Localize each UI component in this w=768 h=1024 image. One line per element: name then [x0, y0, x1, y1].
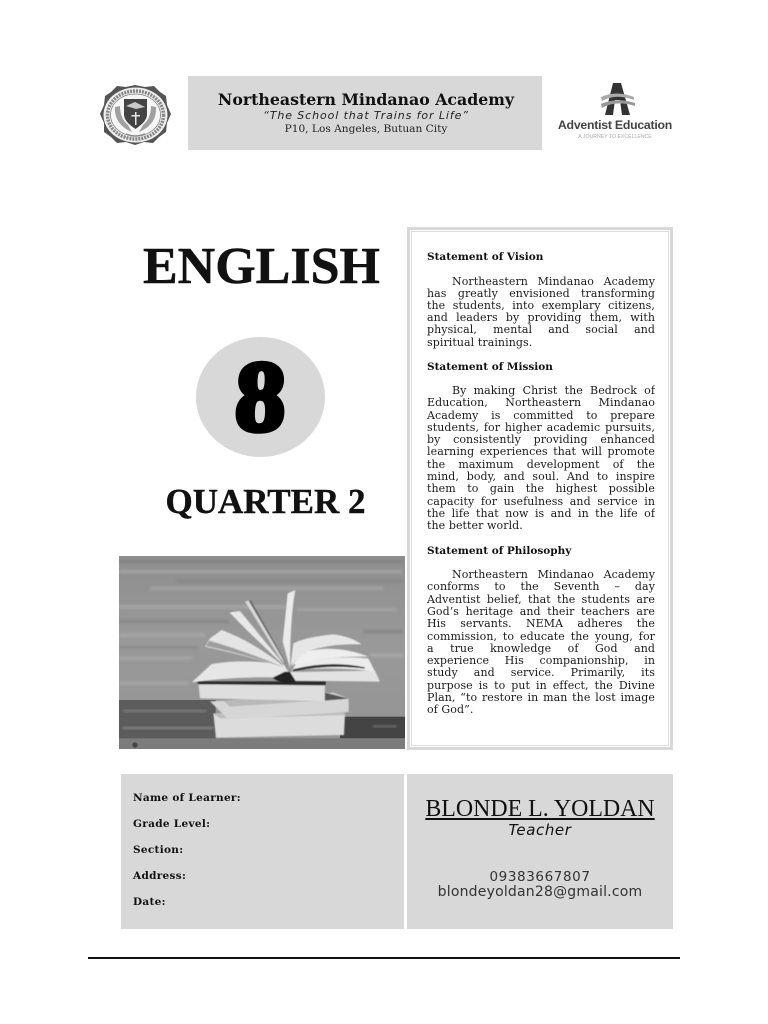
text: statement of philosophy: Northeastern Mindanao Academy	[452, 568, 655, 581]
logo tagline: A JOURNEY TO EXCELLENCE	[578, 134, 652, 140]
panel: statements	[407, 227, 673, 750]
teacher name: BLONDE L. YOLDAN	[425, 796, 655, 822]
text: statement of mission: Statement of Mission	[427, 361, 553, 373]
text: statement of philosophy: a true knowledge of God and	[427, 642, 655, 655]
text: statement of philosophy: Plan, “to restore in man the lost image	[427, 691, 655, 704]
panel: learner details	[121, 774, 404, 929]
text: statement of philosophy: of God”.	[427, 703, 473, 716]
text: statement of mission	[427, 361, 655, 532]
text: statement of mission: them to gain the highest possible	[427, 482, 655, 495]
school motto: “The School that Trains for Life”	[263, 109, 469, 122]
logo: Adventist Education	[558, 83, 672, 140]
text: statement of mission: Education, Northeastern Mindanao	[427, 396, 655, 409]
open book	[192, 590, 380, 683]
text: statement of vision: and leaders by providing them, with	[427, 311, 655, 324]
text: statement of mission: By making Christ the Bedrock of	[452, 384, 655, 397]
text: statement of philosophy	[427, 545, 655, 716]
text: statement of mission: the life that now is and in the life of	[427, 507, 655, 520]
text: statement of mission: by consistently providing enhanced	[427, 433, 655, 446]
text: statement of philosophy: God’s heritage and their teachers are	[427, 605, 655, 618]
photo: stack of books	[119, 556, 405, 749]
book stack	[197, 681, 349, 738]
teacher role: Teacher	[508, 821, 572, 839]
text: statement of mission: mind, body, and soul. And to inspire	[427, 470, 655, 483]
text: statement of philosophy: study and service. Primarily, its	[427, 666, 655, 679]
field: address: Address:	[133, 870, 186, 882]
grade badge	[196, 337, 325, 457]
text: statement of vision: the students, into exemplary citizens,	[427, 299, 655, 312]
teacher phone: 09383667807	[489, 869, 591, 885]
text: statement of philosophy: Adventist belief, that the students are	[427, 593, 655, 606]
field: date: Date:	[133, 896, 166, 908]
text: statement of vision	[427, 251, 655, 349]
text: statement of mission: the better world.	[427, 519, 523, 532]
school address: P10, Los Angeles, Butuan City	[285, 123, 447, 135]
school name: Northeastern Mindanao Academy	[218, 90, 514, 109]
subtitle: quarter: QUARTER 2	[165, 482, 366, 521]
logo wordmark: Adventist Education	[558, 118, 672, 132]
text: statement of philosophy: purpose is to put in effect, the Divine	[427, 679, 655, 692]
text: statement of vision: spiritual trainings.	[427, 336, 532, 349]
text: statement of philosophy: His servants. NEMA adheres the	[427, 617, 655, 630]
text: statement of philosophy: experience His companionship, in	[427, 654, 655, 667]
text: statement of vision: Statement of Vision	[427, 251, 543, 263]
text: statement of vision: physical, mental and social and	[427, 323, 655, 336]
text: statement of mission: learning experiences that will promote	[427, 445, 655, 458]
field: section: Section:	[133, 844, 183, 856]
grade number: 8	[234, 341, 287, 452]
text: statement of mission: the maximum development of the	[427, 458, 655, 471]
text: statement of mission: Academy is committed to prepare	[427, 409, 655, 422]
teacher email: blondeyoldan28@gmail.com	[438, 884, 642, 900]
panel: teacher details	[407, 774, 673, 929]
icon: Adventist A mark	[601, 83, 635, 115]
field: grade level: Grade Level:	[133, 818, 210, 830]
text: statement of vision: Northeastern Mindanao Academy	[452, 275, 655, 288]
icon: academy seal	[100, 85, 171, 145]
header banner	[188, 76, 542, 150]
text: statement of vision: has greatly envisioned transforming	[427, 287, 655, 300]
field: name of learner: Name of Learner:	[133, 792, 241, 804]
text: statement of philosophy: conforms to the Seventh – day	[427, 580, 655, 593]
text: statement of mission: students, for higher academic pursuits,	[427, 421, 655, 434]
shelf	[119, 700, 405, 749]
text: statement of philosophy: Statement of Philosophy	[427, 545, 571, 557]
text: statement of mission: capacity for usefulness and service in	[427, 495, 655, 508]
text: statement of philosophy: commission, to educate the young, for	[427, 630, 655, 643]
title: ENGLISH: ENGLISH	[143, 238, 380, 295]
